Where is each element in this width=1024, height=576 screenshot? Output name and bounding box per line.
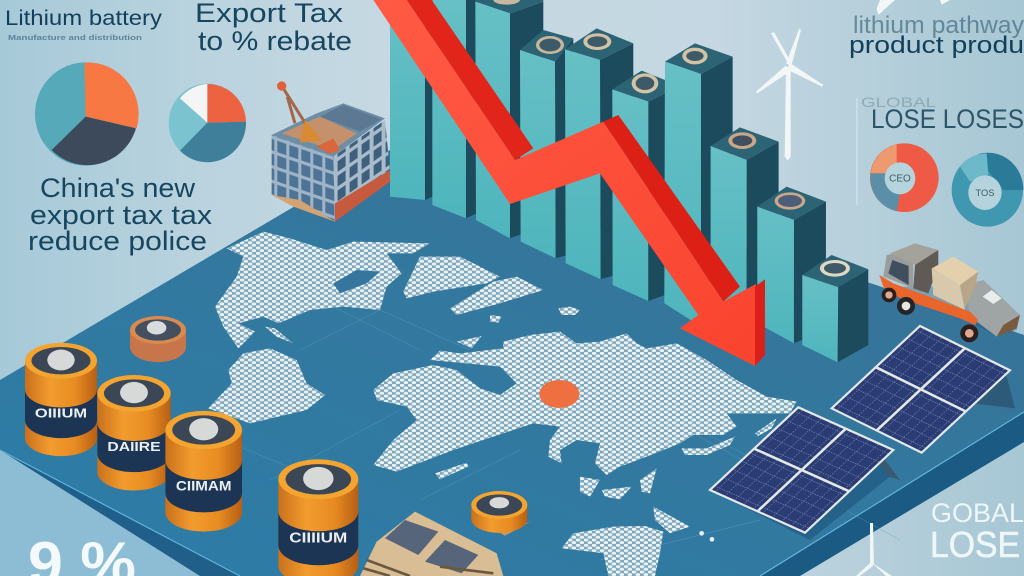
panel: platform <box>0 150 1024 576</box>
bar 3 <box>475 0 543 238</box>
icon: battery three <box>165 411 242 532</box>
chart: pie two <box>169 84 246 162</box>
chart: dotted world map <box>208 232 797 576</box>
icon: battery two <box>97 375 171 490</box>
bar 6 <box>612 71 665 301</box>
heading: china's new policy <box>28 173 213 256</box>
bar 5 <box>565 28 633 279</box>
bar 10 <box>802 255 868 362</box>
bar 4 <box>520 30 573 258</box>
icon: factory box <box>272 81 390 222</box>
icon: solar panels <box>710 326 1015 540</box>
icon: coin battery <box>471 491 530 536</box>
icon: battery four: CIIIIUM <box>289 530 347 546</box>
icon: battery two: DAIIRE <box>107 439 161 454</box>
map: north and south america <box>208 232 580 423</box>
heading: lithium battery: Lithium battery <box>5 7 163 30</box>
bar 8 <box>711 127 779 320</box>
text: global lose: GOBAL <box>931 498 1024 528</box>
heading: lithium product: product produ <box>849 32 1024 59</box>
icon: small flat battery <box>130 316 186 362</box>
arrow: falling red trend <box>373 0 765 366</box>
icon: battery three: CIIMAM <box>176 479 231 494</box>
bar 7 <box>664 43 733 327</box>
heading: china's new policy: export tax tax <box>30 200 213 230</box>
icon: battery one <box>25 343 97 456</box>
chart: donut one <box>870 143 939 212</box>
chart: pie one <box>35 62 139 166</box>
panel: upper solar array <box>832 326 1010 453</box>
heading: rebate: to % rebate <box>198 26 352 56</box>
heading: lithium product <box>849 12 1024 59</box>
heading: china's new policy: China's new <box>40 173 196 203</box>
icon: battery four <box>278 459 358 576</box>
text: global lose: LOSE <box>930 524 1020 565</box>
map: eurasia africa australia <box>373 332 797 576</box>
icon: stacks of documents <box>360 512 503 576</box>
icon: bottom wind turbine <box>856 523 892 576</box>
chart: donut one: CEO <box>889 174 911 185</box>
icon: battery one: OIIIUM <box>35 406 87 421</box>
text: small caption: Manufacture and distribution <box>8 33 143 42</box>
chart axis: faint frame <box>856 98 858 205</box>
bar 9 <box>757 187 826 343</box>
chart: donut two <box>952 153 1023 227</box>
panel: lower solar array <box>710 407 893 533</box>
icon: turbine tips <box>877 0 950 15</box>
icon: wind turbine <box>756 28 823 161</box>
bar 1 <box>390 0 433 200</box>
icon: delivery truck <box>879 243 1020 342</box>
bar 2 <box>432 0 477 218</box>
heading: lithium product: lithium pathway <box>853 12 1024 39</box>
heading: global losses: GLOBAL <box>861 94 936 110</box>
icon: orange china marker <box>539 380 579 408</box>
text: global lose <box>930 498 1024 565</box>
chart: falling bars <box>390 0 868 362</box>
chart: donut two: TOS <box>975 188 994 198</box>
heading: china's new policy: reduce police <box>28 226 207 256</box>
